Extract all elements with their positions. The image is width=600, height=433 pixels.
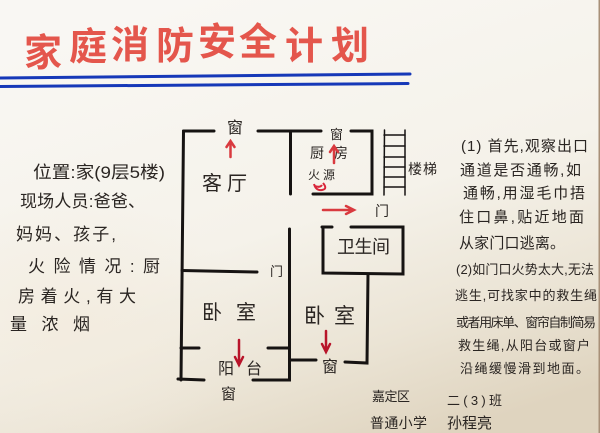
- text block: escape step 2: (2)如门口火势太大,无法: [456, 262, 594, 277]
- window and door labels: 窗: [330, 127, 343, 142]
- signature: 孙程亮: [447, 415, 492, 432]
- text block: escape step 1: 从家门口逃离。: [459, 235, 565, 252]
- text block: situation: 位置:家(9层5楼): [33, 163, 165, 182]
- window and door labels: 窗: [227, 119, 243, 137]
- text block: situation: 现场人员:爸爸、: [20, 192, 145, 211]
- window and door labels: 门: [270, 264, 283, 279]
- room labels: 客厅: [202, 172, 247, 195]
- text block: escape step 1: (1) 首先,观察出口: [461, 137, 588, 155]
- double blue underline: [0, 74, 410, 86]
- room labels: 厨房: [310, 145, 348, 161]
- escape arrows: [226, 141, 354, 365]
- room labels: 楼梯: [408, 161, 437, 177]
- room labels: [202, 145, 437, 378]
- text block: escape step 2: 或者用床单、窗帘自制简易: [456, 315, 596, 330]
- stairs ladder: [384, 130, 405, 195]
- text block: escape step 1: [459, 137, 588, 252]
- window and door labels: [221, 119, 389, 403]
- signature: 嘉定区: [372, 389, 410, 404]
- floor plan: [178, 130, 405, 380]
- text block: situation: [10, 163, 165, 334]
- text block: situation: 妈妈、孩子,: [16, 225, 116, 244]
- signature: 二(3)班: [447, 393, 502, 408]
- room labels: 卧室: [202, 301, 256, 324]
- walls: [178, 131, 403, 380]
- room labels: 卧室: [304, 305, 355, 328]
- room labels: 火源: [308, 168, 335, 182]
- window and door labels: 门: [375, 203, 389, 219]
- title: 家庭消防安全计划: [24, 22, 369, 75]
- text block: escape step 2: 逃生,可找家中的救生绳: [455, 288, 597, 303]
- text block: escape step 1: 通道是否通畅,如: [460, 162, 581, 179]
- signature: [370, 389, 502, 432]
- text block: escape step 1: 通畅,用湿毛巾捂: [463, 185, 585, 202]
- window and door labels: 窗: [322, 358, 338, 376]
- text block: situation: 量浓烟: [10, 315, 90, 334]
- text block: escape step 2: 沿绳缓慢滑到地面。: [460, 361, 589, 376]
- room labels: 阳台: [218, 360, 262, 378]
- text block: situation: 火险情况:厨: [28, 257, 160, 276]
- text block: situation: 房着火,有大: [18, 287, 136, 306]
- text block: escape step 2: [455, 262, 597, 376]
- signature: 普通小学: [370, 415, 427, 431]
- text block: escape step 1: 住口鼻,贴近地面: [459, 209, 584, 226]
- window and door labels: 窗: [221, 385, 236, 403]
- icon: fire source: [314, 183, 325, 190]
- text block: escape step 2: 救生绳,从阳台或窗户: [458, 338, 590, 353]
- room labels: 卫生间: [337, 237, 390, 257]
